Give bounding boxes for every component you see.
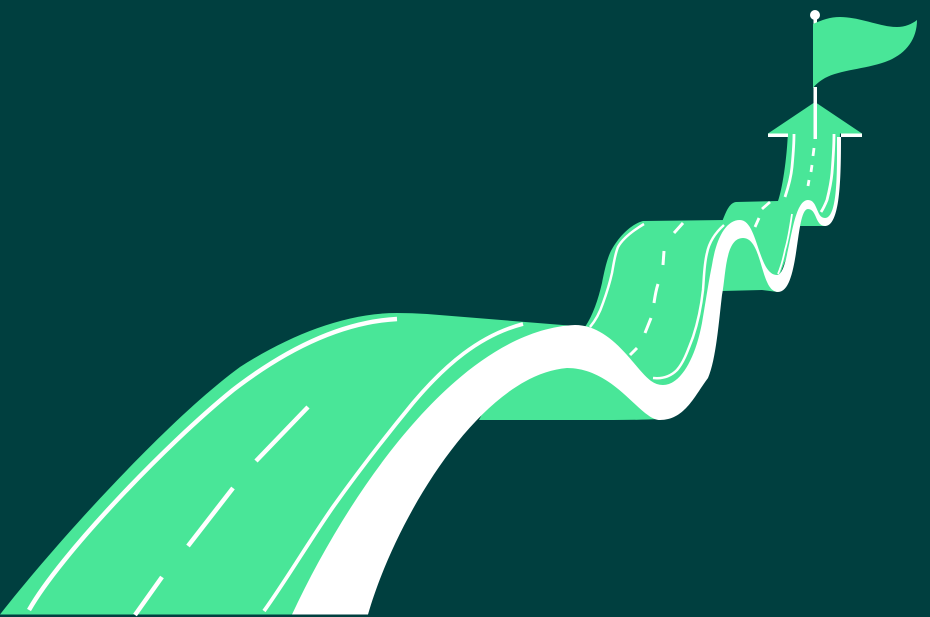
flag cloth [813, 17, 917, 88]
road underside panels [479, 205, 826, 420]
centre dashes, second section [630, 223, 683, 355]
road surface [0, 102, 862, 614]
arrow shaft right line [821, 134, 834, 212]
flag [810, 10, 917, 139]
arrow head base edges [768, 134, 862, 137]
left edge line, second section [590, 224, 644, 327]
right edge line, second section [653, 225, 724, 378]
left edge line, foreground [29, 319, 397, 610]
arrow head [768, 102, 862, 134]
right edge line, foreground [264, 324, 523, 611]
white road edge ribbon [292, 137, 841, 614]
foreground road section [0, 313, 585, 614]
lane markings [29, 134, 834, 615]
centre dashes, foreground [135, 407, 308, 615]
arrow shaft left line [785, 134, 794, 197]
flag pole white section [814, 87, 817, 139]
centre dashes, third section [755, 202, 770, 227]
pole tip [814, 18, 817, 24]
arrow shaft centre dashes [808, 148, 814, 186]
pole ball [810, 10, 820, 20]
second road section [585, 220, 741, 395]
third road section [722, 130, 840, 282]
inner edge line, third section [778, 214, 792, 274]
